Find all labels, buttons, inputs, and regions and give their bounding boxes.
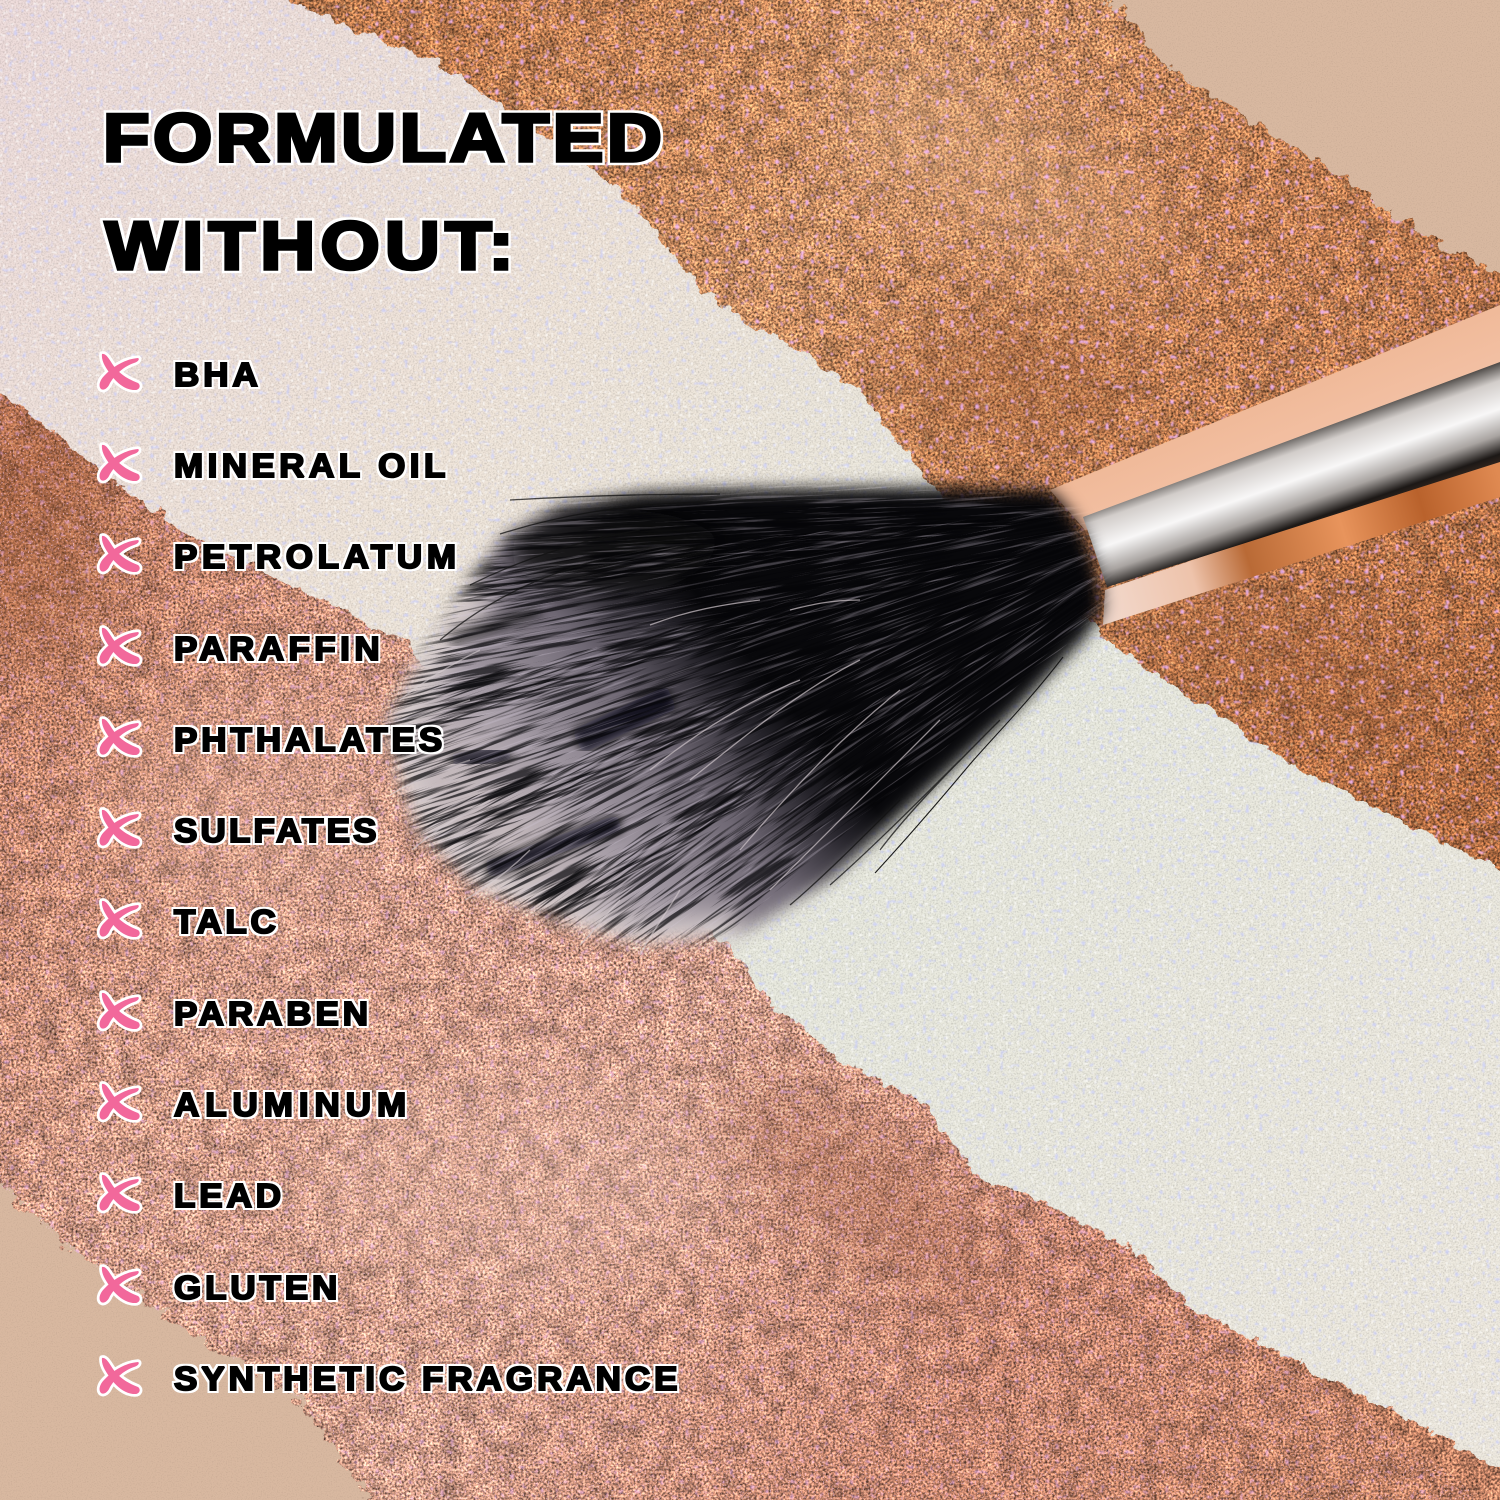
item: Talc: [100, 901, 276, 941]
item: Paraffin: [100, 628, 380, 668]
exclusion list: [100, 354, 678, 1398]
powder swatch: copper band: [288, 0, 1500, 871]
item: Petrolatum: PETROLATUM: [174, 539, 456, 576]
item: Paraben: [100, 993, 368, 1033]
item: BHA: [100, 354, 258, 394]
item: Paraffin: PARAFFIN: [174, 631, 380, 668]
item: Lead: [100, 1175, 281, 1215]
title: FORMULATED: [103, 101, 662, 176]
item: Phthalates: PHTHALATES: [174, 722, 442, 759]
item: Paraben: PARABEN: [174, 996, 368, 1033]
item: Synthetic Fragrance: SYNTHETIC FRAGRANCE: [174, 1361, 677, 1398]
powder swatch: rose pink band: [0, 394, 1500, 1500]
item: Talc: TALC: [174, 904, 276, 941]
item: Sulfates: [100, 810, 376, 850]
item: Gluten: [100, 1267, 337, 1307]
title: WITHOUT:: [105, 209, 514, 284]
item: Aluminum: ALUMINUM: [174, 1087, 406, 1124]
item: Sulfates: SULFATES: [174, 813, 376, 850]
item: Lead: LEAD: [174, 1178, 281, 1215]
brush handle: [1050, 305, 1500, 625]
item: Mineral Oil: MINERAL OIL: [174, 448, 445, 485]
title: [103, 101, 662, 284]
brush head: [374, 474, 1116, 957]
item: Gluten: GLUTEN: [174, 1270, 337, 1307]
item: BHA: BHA: [174, 357, 258, 394]
